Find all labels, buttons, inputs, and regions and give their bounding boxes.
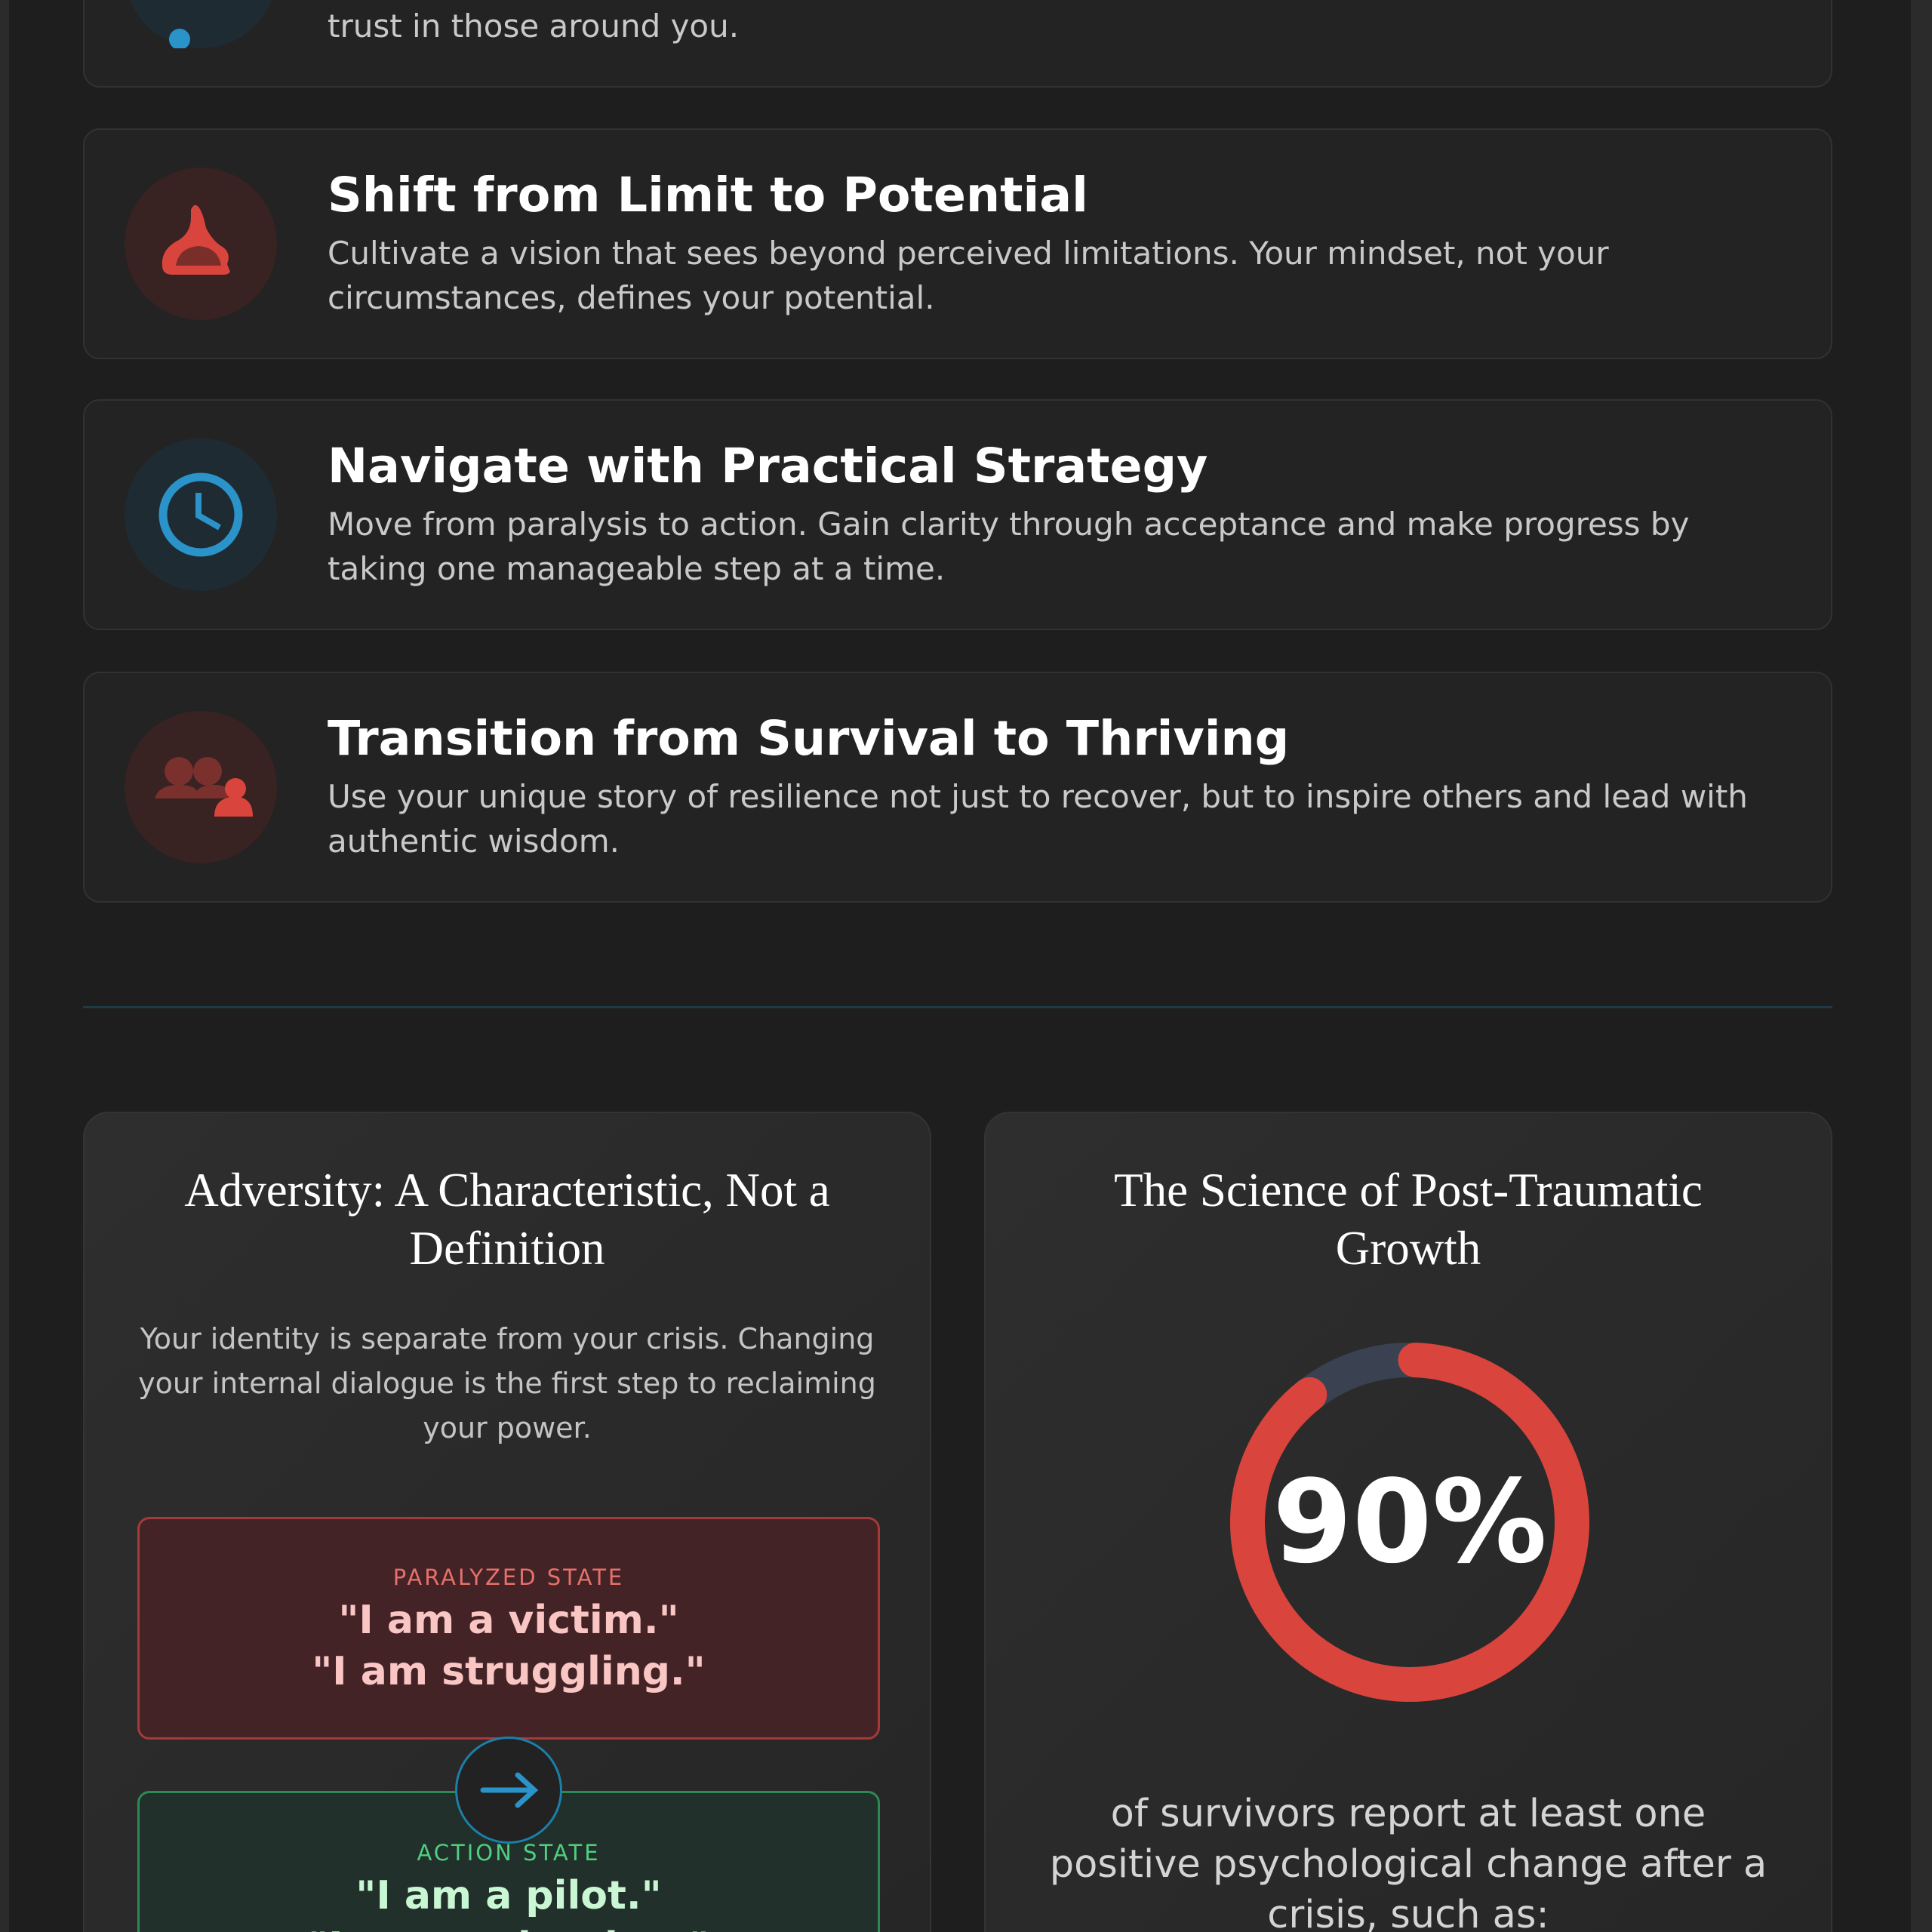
title: Shift from Limit to Potential xyxy=(328,167,1088,223)
donut chart 90%: 90% xyxy=(1272,1455,1547,1589)
box: paralyzed state: "I am a victim." xyxy=(338,1598,679,1643)
icon: people xyxy=(125,711,277,863)
description: Use your unique story of resilience not just to recover, but to inspire others and lead with authentic wisdom. xyxy=(328,778,1748,860)
panel: science xyxy=(984,1112,1832,1932)
icon: partial blue circle xyxy=(125,0,277,48)
donut chart 90% xyxy=(1230,1343,1589,1702)
panel: adversity xyxy=(83,1112,931,1932)
icon: clock xyxy=(125,438,277,591)
card: Transition from Survival to Thriving xyxy=(83,672,1832,903)
panel title: The Science of Post-Traumatic xyxy=(1114,1164,1703,1217)
panel title: Definition xyxy=(410,1222,605,1275)
box: paralyzed state xyxy=(137,1517,880,1740)
card: Navigate with Practical Strategy xyxy=(83,399,1832,630)
arrow circle xyxy=(455,1737,562,1844)
title: Transition from Survival to Thriving xyxy=(328,710,1289,766)
card: Shift from Limit to Potential xyxy=(83,128,1832,359)
card text: trust in those around you. xyxy=(328,8,739,45)
paragraph: Your identity is separate from your crisis. Changing your internal dialogue is the first step to reclaiming your power. xyxy=(138,1322,876,1444)
description: Cultivate a vision that sees beyond perceived limitations. Your mindset, not your circumstances, defines your potential. xyxy=(328,235,1609,316)
panel title xyxy=(1114,1164,1703,1275)
icon: flask xyxy=(125,168,277,320)
panel title: Adversity: A Characteristic, Not a xyxy=(184,1164,830,1217)
box: action state: "I am a pilot." xyxy=(355,1873,662,1918)
panel title xyxy=(184,1164,830,1275)
card: first (partial) xyxy=(83,0,1832,88)
title: Navigate with Practical Strategy xyxy=(328,438,1208,494)
box: paralyzed state: "I am struggling." xyxy=(312,1649,706,1694)
description: Move from paralysis to action. Gain clarity through acceptance and make progress by taking one manageable step at a time. xyxy=(328,506,1689,587)
box: action state xyxy=(137,1791,880,1932)
box: paralyzed state: PARALYZED STATE xyxy=(393,1564,624,1590)
box: action state: ACTION STATE xyxy=(417,1840,601,1866)
panel title: Growth xyxy=(1336,1222,1481,1275)
